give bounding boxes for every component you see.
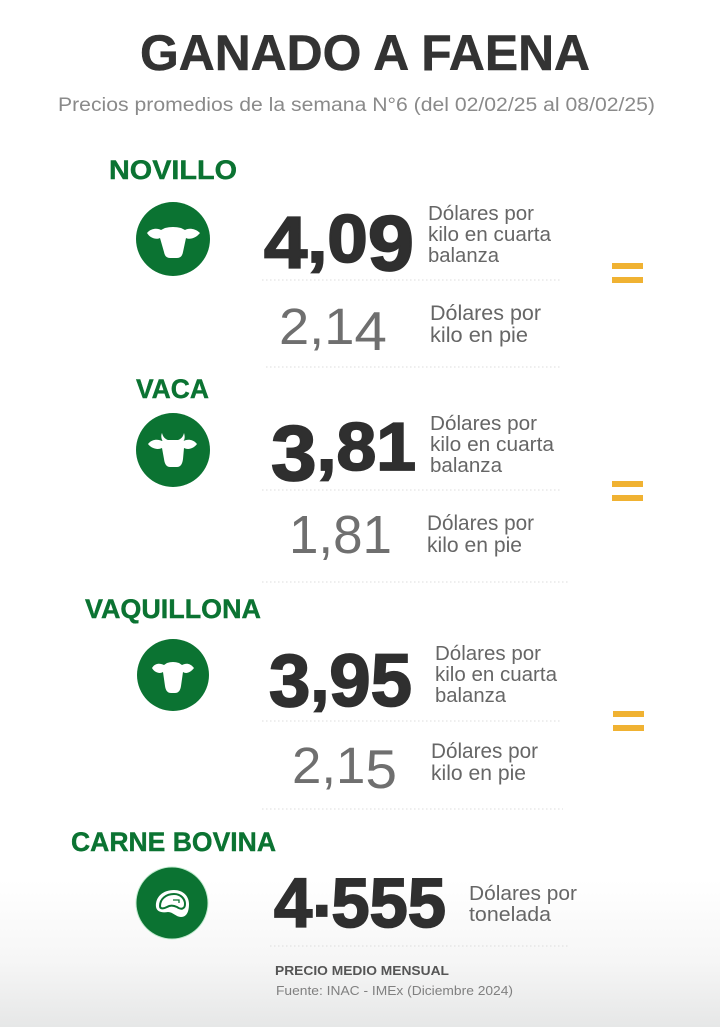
heading: carne bovina: CARNE BOVINA [71,827,276,857]
icon: equal sign vaquillona [613,711,644,731]
label: carne bovina: Dólares por [469,883,577,905]
price: novillo en pie: 4 [354,300,387,362]
price: vaca en pie: 1,81 [289,505,392,565]
label: vaquillona cuarta balanza: kilo en cuarta [435,664,558,686]
label: vaquillona cuarta balanza: Dólares por [435,643,541,665]
price: vaquillona cuarta balanza: , [310,640,329,716]
price: novillo cuarta balanza: 9 [368,199,414,287]
subtitle: Precios promedios de la semana N°6 (del 02/02/25 al 08/02/25) [58,95,655,116]
label: vaca cuarta balanza: Dólares por [430,413,537,435]
label: novillo en pie: kilo en pie [430,324,528,347]
price: carne bovina: 555 [331,864,446,942]
label: vaquillona cuarta balanza: balanza [435,685,507,707]
panel: vaca [136,374,643,565]
panel: vaquillona [85,594,644,800]
footer note: precio medio mensual: PRECIO MEDIO MENSUAL [275,963,449,978]
price: novillo cuarta balanza: 0 [327,201,365,277]
price: vaca cuarta balanza: ,81 [317,409,416,485]
price: novillo cuarta balanza: , [307,201,327,277]
label: novillo cuarta balanza: balanza [428,245,500,267]
price: vaquillona cuarta balanza: 3 [269,639,310,722]
label: novillo cuarta balanza: kilo en cuarta [428,224,552,246]
price: carne bovina: 4 [274,864,313,942]
price: vaquillona cuarta balanza: 95 [329,639,412,722]
label: vaca cuarta balanza: kilo en cuarta [430,434,555,456]
price: carne bovina: . [312,853,331,931]
icon: novillo head [136,202,210,276]
icon: vaca head [136,413,210,487]
icon: equal sign novillo [612,263,643,283]
icon: vaquillona head [137,639,209,711]
label: vaquillona en pie: kilo en pie [431,762,526,785]
footer source: Fuente: INAC - IMEx (Diciembre 2024) [276,983,513,998]
heading: novillo: NOVILLO [109,155,237,185]
panel: carne bovina [71,827,577,942]
label: vaquillona en pie: Dólares por [431,740,538,763]
panel: novillo [109,155,643,362]
label: vaca en pie: Dólares por [427,512,534,535]
price: vaca cuarta balanza: 3 [271,409,317,497]
label: vaca cuarta balanza: balanza [430,455,503,477]
icon: cut of beef [136,866,208,940]
heading: vaca: VACA [136,374,209,404]
price: vaquillona en pie: 2,1 [292,737,363,794]
title: GANADO A FAENA [140,25,590,81]
heading: vaquillona: VAQUILLONA [85,594,261,624]
price: novillo cuarta balanza: 4 [264,203,308,284]
label: carne bovina: tonelada [469,904,552,926]
price: novillo en pie: 2,1 [279,298,350,355]
icon: equal sign vaca [612,481,643,501]
label: novillo cuarta balanza: Dólares por [428,203,534,225]
label: novillo en pie: Dólares por [430,302,541,325]
label: vaca en pie: kilo en pie [427,534,522,557]
price: vaquillona en pie: 5 [365,738,397,800]
